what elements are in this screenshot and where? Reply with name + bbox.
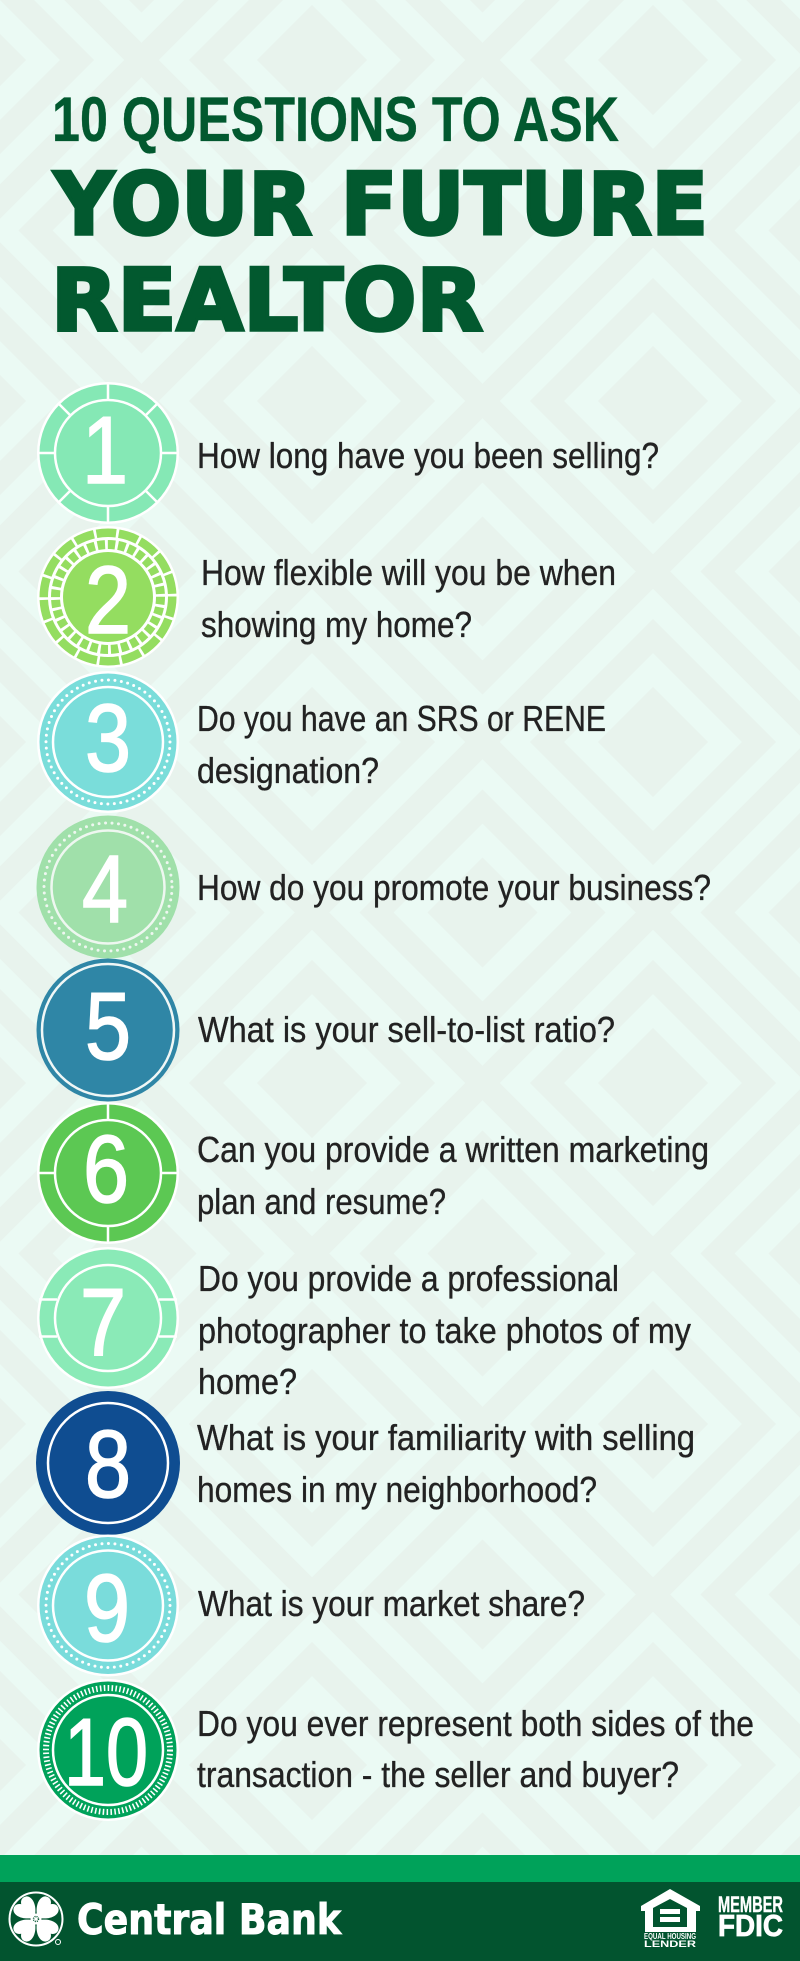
badge 3	[37, 671, 179, 813]
question 4	[36, 816, 711, 958]
title: REALTOR	[51, 251, 483, 351]
FDIC member mark	[718, 1892, 783, 1943]
question 5	[36, 958, 615, 1102]
question 6	[37, 1102, 709, 1244]
question 9: What is your market share?	[198, 1583, 585, 1624]
question 7	[37, 1247, 691, 1402]
question 7: photographer to take photos of my	[198, 1310, 691, 1351]
footer band: dark green	[0, 1882, 800, 1961]
question 8: What is your familiarity with selling	[197, 1417, 695, 1458]
badge 8	[36, 1391, 180, 1535]
question 8: homes in my neighborhood?	[197, 1469, 597, 1510]
FDIC member mark: FDIC	[718, 1909, 783, 1943]
badge 1	[37, 382, 179, 524]
badge 6	[37, 1102, 179, 1244]
badge 8: 8	[85, 1411, 131, 1518]
badge 4	[36, 816, 180, 958]
question 10	[37, 1679, 754, 1821]
icon: equal housing lender	[641, 1889, 700, 1950]
question 9	[37, 1534, 585, 1676]
badge 7	[37, 1247, 179, 1389]
question 3: Do you have an SRS or RENE	[197, 698, 606, 739]
question 4: How do you promote your business?	[197, 867, 711, 908]
question 5: What is your sell-to-list ratio?	[198, 1009, 615, 1050]
icon: Central Bank clover logo	[10, 1892, 62, 1946]
badge 10	[37, 1679, 179, 1821]
badge 2	[37, 526, 179, 668]
question 6: Can you provide a written marketing	[197, 1129, 709, 1170]
badge 6: 6	[83, 1116, 129, 1223]
badge 5: 5	[85, 973, 131, 1080]
badge 1: 1	[82, 397, 128, 504]
title: YOUR FUTURE	[53, 155, 708, 255]
question 2: showing my home?	[201, 604, 472, 645]
question 7: Do you provide a professional	[198, 1258, 619, 1299]
question 7: home?	[198, 1361, 297, 1402]
icon: equal housing lender: EQUAL HOUSING	[644, 1932, 696, 1941]
badge 10: 10	[64, 1699, 148, 1806]
question 8	[36, 1391, 695, 1535]
question 2	[37, 526, 616, 668]
badge 9: 9	[84, 1555, 130, 1662]
footer band: bright green	[0, 1855, 800, 1882]
badge 7: 7	[80, 1269, 126, 1376]
question 6: plan and resume?	[197, 1181, 446, 1222]
title	[51, 85, 708, 351]
badge 5	[36, 958, 180, 1102]
question 1	[37, 382, 659, 524]
icon: equal housing lender: LENDER	[644, 1939, 696, 1950]
badge 4: 4	[82, 836, 128, 943]
brand name: Central Bank	[77, 1895, 342, 1944]
question 3: designation?	[197, 750, 379, 791]
question 1: How long have you been selling?	[197, 435, 659, 476]
question 2: How flexible will you be when	[201, 552, 616, 593]
title: 10 QUESTIONS TO ASK	[52, 85, 619, 155]
badge 2: 2	[85, 547, 131, 654]
question 3	[37, 671, 606, 813]
question 10: transaction - the seller and buyer?	[197, 1754, 679, 1795]
badge 9	[37, 1534, 179, 1676]
badge 3: 3	[85, 685, 131, 792]
